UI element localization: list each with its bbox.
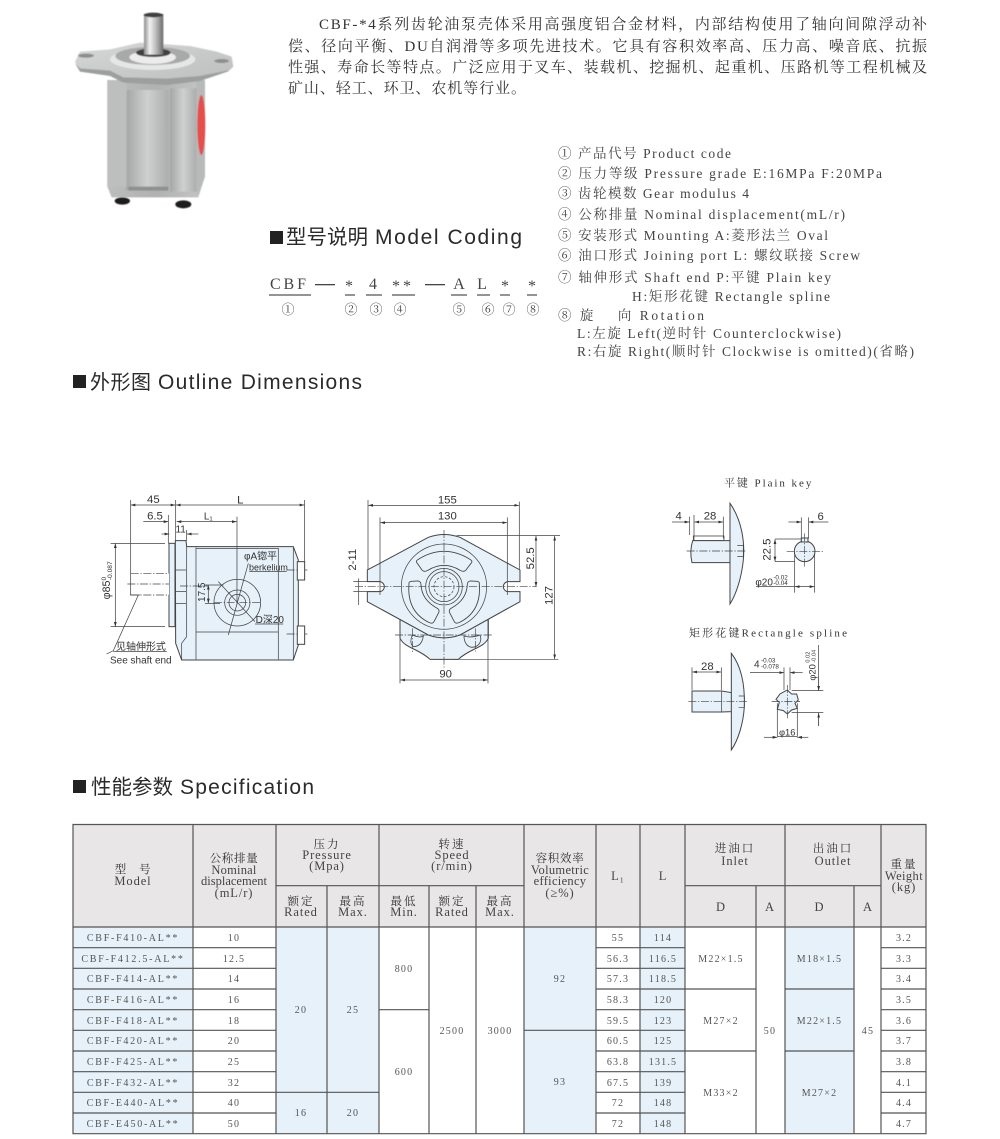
table header: Volumetric	[531, 863, 589, 877]
drawing: side view: φ85	[101, 581, 113, 599]
table: pressure, speed and efficiency values: 93	[554, 1077, 566, 1088]
table header: (Mpa)	[309, 859, 345, 873]
table: weight column: 3.2	[896, 933, 912, 944]
spline section: -0.078	[761, 663, 779, 670]
table: model column: CBF-F432-AL**	[87, 1078, 179, 1089]
legend: code meanings: ① 产品代号 Product code	[558, 145, 731, 161]
model code diagram: *	[345, 278, 353, 295]
table header	[114, 837, 923, 919]
legend: code meanings: ⑤ 安装形式 Mounting A:菱形法兰 Oval	[558, 227, 828, 243]
table: port values: M27×2	[703, 1016, 739, 1027]
table header: D	[716, 900, 726, 914]
legend: code meanings: L:左旋 Left(逆时针 Counterclockwise)	[577, 325, 841, 341]
table header: Nominal	[211, 863, 257, 877]
table: displacement column: 12.5	[223, 954, 245, 965]
table: L column: 148	[654, 1098, 672, 1109]
plain key section: 6	[817, 511, 824, 523]
plain key shaft view	[672, 503, 745, 604]
table: L1 column: 72	[612, 1119, 624, 1130]
table header: 进油口	[715, 841, 755, 855]
table: pressure, speed and efficiency values: 3000	[488, 1026, 512, 1037]
intro paragraph: 性强、寿命长等特点。广泛应用于叉车、装载机、挖掘机、起重机、压路机等工程机械及	[288, 58, 927, 76]
table: model column: CBF-F420-AL**	[87, 1036, 179, 1047]
spline section: φ16	[779, 727, 795, 737]
intro paragraph	[288, 15, 927, 97]
table: pressure, speed and efficiency values: 800	[395, 964, 413, 975]
table: L column: 116.5	[649, 954, 677, 965]
table: L1 column: 56.3	[607, 954, 629, 965]
table: port values	[698, 954, 874, 1099]
table header: 转速	[438, 837, 466, 851]
plain key section: -0.02	[773, 574, 788, 581]
table: displacement column	[223, 933, 245, 1130]
table: displacement column: 50	[228, 1119, 240, 1130]
model code diagram: A	[453, 276, 465, 293]
table: pressure, speed and efficiency values	[295, 964, 566, 1119]
model code diagram: 4	[369, 276, 377, 293]
table header: 型 号	[115, 862, 151, 876]
table: L column: 139	[654, 1078, 672, 1089]
drawing: side view: berkelium	[249, 563, 288, 573]
spline shaft view	[688, 653, 747, 750]
table: L column: 120	[654, 995, 672, 1006]
drawing: front view: 2-11	[347, 549, 359, 571]
table header: 最高	[340, 894, 366, 908]
table header: (mL/r)	[215, 886, 253, 900]
table: weight column	[896, 933, 912, 1130]
model code diagram: CBF	[270, 276, 306, 293]
table: pressure, speed and efficiency values: 20	[347, 1108, 359, 1119]
table: port values: M33×2	[703, 1088, 739, 1099]
table header: A	[765, 900, 775, 914]
table header: efficiency	[534, 874, 587, 888]
legend: code meanings: R:右旋 Right(顺时针 Clockwise is omitted)(省略)	[577, 343, 914, 359]
table header: (r/min)	[431, 859, 473, 873]
heading: specification: Specification	[180, 776, 314, 799]
table header: displacement	[201, 874, 267, 888]
model code diagram: ⑥	[481, 302, 495, 317]
spline section: 4	[754, 660, 760, 671]
table header: 压力	[314, 837, 340, 851]
intro paragraph: 偿、径向平衡、DU自润滑等多项先进技术。它具有容积效率高、压力高、噪音底、抗振	[288, 37, 927, 55]
spline section: -0.04	[811, 650, 817, 663]
table: displacement column: 40	[228, 1098, 240, 1109]
table: weight column: 3.6	[896, 1016, 912, 1027]
table header: 重量	[890, 857, 918, 871]
table header: A	[863, 900, 873, 914]
model code diagram	[269, 276, 540, 317]
model code diagram: ⑧	[526, 302, 540, 317]
plain key section	[755, 511, 828, 593]
table header: Outlet	[815, 854, 851, 868]
drawing: front view	[347, 494, 560, 683]
intro paragraph: CBF-*4系列齿轮油泵壳体采用高强度铝合金材料，内部结构使用了轴向间隙浮动补	[319, 15, 927, 33]
table: L1 column: 55	[612, 933, 624, 944]
drawing: side view: 见轴伸形式	[116, 640, 166, 653]
drawing: front view: 127	[544, 586, 556, 605]
table: pressure, speed and efficiency values: 20	[295, 1005, 307, 1016]
drawing: side view: 6.5	[147, 511, 163, 523]
spline section: φ20	[807, 664, 817, 681]
table: model column: CBF-F410-AL**	[87, 933, 179, 944]
table header: 最低	[390, 895, 418, 908]
table: weight column: 3.7	[896, 1036, 912, 1047]
model code diagram: ⑦	[502, 302, 516, 317]
table: model column: CBF-E440-AL**	[87, 1098, 179, 1109]
model code diagram: ②	[344, 302, 358, 317]
table: displacement column: 10	[228, 933, 240, 944]
table: displacement column: 20	[228, 1036, 240, 1047]
table header: 公称排量	[210, 851, 258, 865]
legend: code meanings: ③ 齿轮模数 Gear modulus 4	[558, 185, 749, 201]
table header: (kg)	[892, 880, 916, 894]
legend: code meanings: ② 压力等级 Pressure grade E:16MPa F:20MPa	[558, 165, 882, 181]
table: pressure, speed and efficiency values: 16	[295, 1108, 307, 1119]
table header: L	[659, 869, 667, 883]
table: L1 column: 72	[612, 1098, 624, 1109]
table: L column: 123	[654, 1016, 672, 1027]
model code diagram: ⑤	[452, 302, 466, 317]
table: specification	[73, 824, 926, 1134]
table header: (≥%)	[545, 886, 575, 900]
legend: code meanings: ④ 公称排量 Nominal displacement(mL/r)	[558, 206, 845, 222]
table: displacement column: 18	[228, 1016, 240, 1027]
table header: Min.	[390, 905, 418, 919]
table: L1 column	[607, 933, 629, 1130]
model code diagram: *	[528, 278, 536, 295]
table: weight column: 4.4	[896, 1098, 912, 1109]
drawing: side view: φA锪平	[244, 549, 277, 562]
table: pressure, speed and efficiency values: 2500	[440, 1026, 464, 1037]
spline section: -0.03	[761, 657, 776, 664]
legend: code meanings: ⑦ 轴伸形式 Shaft end P:平键 Plain key	[558, 269, 831, 285]
drawing: side view: L	[237, 494, 243, 506]
table: L column: 148	[654, 1119, 672, 1130]
model code diagram: ④	[393, 302, 407, 317]
table: port values: M22×1.5	[797, 1016, 842, 1027]
drawing: side view: See shaft end	[110, 656, 172, 667]
table header: 额定	[288, 894, 314, 908]
drawing: side view: 0	[101, 577, 108, 581]
heading: outline dimensions: 外形图	[90, 371, 151, 394]
table: pressure, speed and efficiency values: 600	[395, 1067, 413, 1078]
drawing: side view	[101, 494, 308, 667]
legend: code meanings: ⑥ 油口形式 Joining port L: 螺纹联接 Screw	[558, 247, 860, 263]
table: L column: 125	[654, 1036, 672, 1047]
table: weight column: 3.8	[896, 1057, 912, 1068]
plain key shaft view: 4	[676, 510, 682, 522]
drawing: side view: D深20	[256, 614, 284, 626]
table header: Max.	[485, 905, 515, 919]
table: pressure, speed and efficiency values: 25	[347, 1005, 359, 1016]
table: port values: 50	[764, 1026, 776, 1037]
table: port values: M27×2	[802, 1088, 837, 1099]
table header: 额定	[438, 894, 466, 908]
heading: specification	[73, 776, 314, 799]
legend: code meanings: H:矩形花键 Rectangle spline	[632, 288, 830, 304]
heading: model coding: 型号说明	[286, 226, 368, 249]
table header: Inlet	[721, 854, 749, 868]
table: L column: 114	[654, 933, 672, 944]
table: model column	[81, 933, 185, 1130]
table: model column: CBF-F414-AL**	[87, 974, 179, 985]
intro paragraph: 矿山、轻工、环卫、农机等行业。	[288, 80, 526, 97]
drawing: side view: L₁	[204, 511, 213, 522]
drawing: shaft end details	[672, 476, 847, 750]
plain key shaft view: 28	[704, 510, 716, 522]
table: L1 column: 60.5	[607, 1036, 629, 1047]
drawing: side view: -0.087	[107, 561, 114, 580]
table: pressure, speed and efficiency values: 92	[554, 974, 566, 985]
table: port values: M18×1.5	[797, 954, 842, 965]
table: model column: CBF-F425-AL**	[87, 1057, 179, 1068]
table: weight column: 4.1	[896, 1078, 912, 1089]
table: L1 column: 59.5	[607, 1016, 629, 1027]
table: L1 column: 58.3	[607, 995, 629, 1006]
table: L column	[649, 933, 677, 1130]
table: weight column: 4.7	[896, 1119, 912, 1130]
table: model column: CBF-F416-AL**	[87, 995, 179, 1006]
table header: Model	[114, 874, 152, 888]
spline shaft view: 28	[701, 661, 714, 673]
table header: Weight	[885, 869, 923, 883]
table: port values: 45	[862, 1026, 874, 1037]
table header: Rated	[435, 905, 469, 919]
table: L1 column: 57.3	[607, 974, 629, 985]
drawing: side view: 17.5	[197, 582, 208, 602]
plain key section: -0.04	[773, 580, 788, 587]
caption: rectangle spline: 矩形花键Rectangle spline	[689, 626, 847, 640]
table: port values: M22×1.5	[698, 954, 744, 965]
table: L1 column: 63.8	[607, 1057, 629, 1068]
photo: gear pump	[75, 13, 233, 208]
heading: model coding: Model Coding	[375, 226, 522, 249]
table header: 容积效率	[536, 851, 584, 865]
table: displacement column: 16	[228, 995, 240, 1006]
table: L column: 131.5	[649, 1057, 677, 1068]
drawing: front view: 155	[438, 494, 457, 506]
table header: Max.	[338, 905, 368, 919]
table header: Speed	[434, 848, 470, 862]
model code diagram: ③	[369, 302, 383, 317]
spline section: 0.02	[805, 652, 811, 663]
heading: specification: 性能参数	[91, 776, 173, 799]
table: displacement column: 14	[228, 974, 240, 985]
table header: 出油口	[813, 841, 853, 855]
drawing: side view: 11	[175, 524, 186, 535]
spline section	[750, 645, 823, 737]
table: displacement column: 25	[228, 1057, 240, 1068]
table header: D	[815, 900, 824, 914]
table: L column: 118.5	[649, 974, 677, 985]
table fills	[73, 824, 926, 1134]
table header: 最高	[486, 894, 514, 908]
drawing: front view: 52.5	[525, 547, 537, 569]
heading: model coding	[270, 226, 522, 249]
table header: Rated	[284, 905, 318, 919]
drawing: side view: 45	[147, 494, 160, 506]
table: L1 column: 67.5	[607, 1078, 629, 1089]
drawing: front view: 130	[438, 511, 457, 523]
legend: code meanings	[558, 145, 914, 359]
model code diagram: ①	[281, 302, 295, 317]
legend: code meanings: ⑧ 旋 向 Rotation	[558, 308, 704, 323]
table: model column: CBF-E450-AL**	[87, 1119, 179, 1130]
table: weight column: 3.4	[896, 974, 912, 985]
model code diagram: **	[392, 278, 414, 295]
table: displacement column: 32	[228, 1078, 240, 1089]
model code diagram: L	[477, 276, 487, 293]
plain key section: 22.5	[762, 539, 774, 561]
table: model column: CBF-F412.5-AL**	[81, 954, 185, 965]
drawing: front view: 90	[439, 668, 452, 680]
table: weight column: 3.3	[896, 954, 912, 965]
model code diagram: *	[501, 278, 509, 295]
table: weight column: 3.5	[896, 995, 912, 1006]
table header: L₁	[611, 869, 625, 883]
table: model column: CBF-F418-AL**	[87, 1016, 179, 1027]
table header: Pressure	[302, 848, 352, 862]
heading: outline dimensions: Outline Dimensions	[158, 371, 362, 394]
caption: plain key: 平键 Plain key	[724, 476, 812, 490]
plain key section: φ20	[755, 578, 773, 589]
